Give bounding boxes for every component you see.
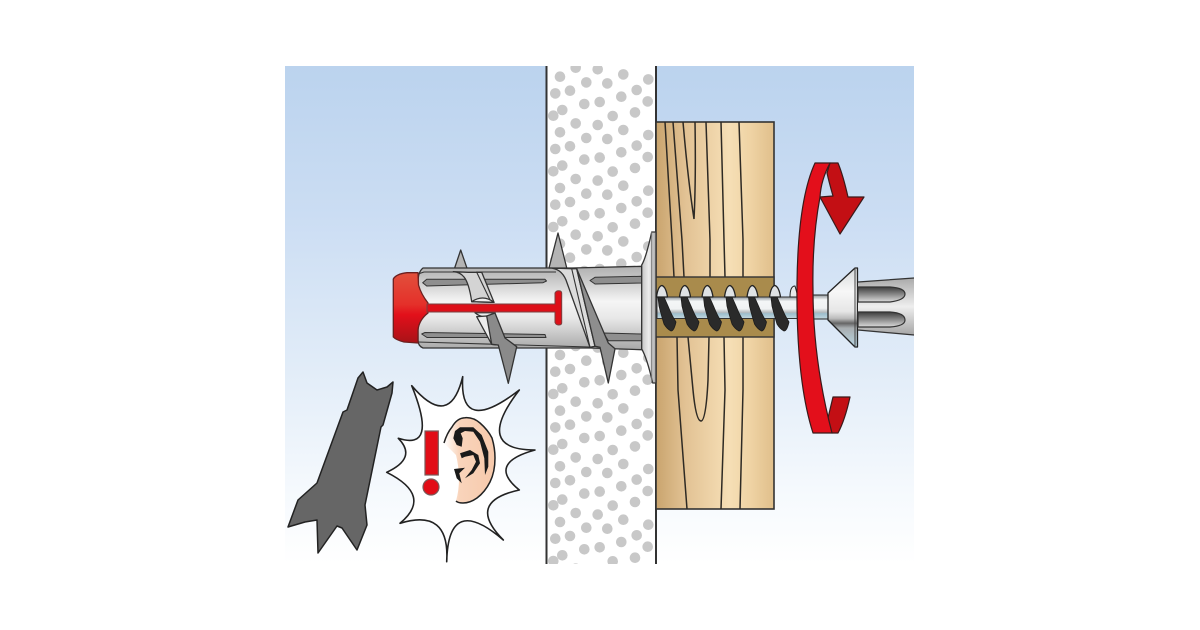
left wing pivot <box>472 298 495 317</box>
screwdriver bit <box>858 278 914 335</box>
installation illustration <box>285 66 914 564</box>
ear <box>444 418 495 503</box>
red cap <box>393 273 428 343</box>
arrow: red rotation <box>797 163 864 433</box>
screw <box>656 268 858 347</box>
flange <box>642 232 656 383</box>
anchor ribs <box>418 272 590 347</box>
burst star <box>387 377 535 562</box>
arrow front band <box>797 163 832 433</box>
screw head <box>828 268 858 347</box>
drilled hole in wood <box>656 277 774 337</box>
arrow lower tail <box>827 397 850 433</box>
anchor slots <box>422 276 642 341</box>
panel: wooden board <box>656 122 774 509</box>
red T marker <box>427 291 562 325</box>
screw neck <box>813 295 828 319</box>
broken plug tool <box>288 372 393 553</box>
arrow back with head <box>820 163 864 234</box>
left wing upper band <box>453 272 494 302</box>
screw shaft <box>657 297 813 318</box>
panel: sky background <box>285 66 914 564</box>
panel: drywall with dots <box>546 13 656 576</box>
exclamation mark <box>423 431 439 495</box>
right wing band <box>549 268 595 347</box>
screw threads <box>656 286 798 331</box>
anchor: expanding plug <box>393 232 656 383</box>
anchor body <box>418 266 642 350</box>
left wing lower band <box>477 316 498 345</box>
anchor rear spikes <box>453 233 567 272</box>
noise burst callout <box>387 377 535 562</box>
